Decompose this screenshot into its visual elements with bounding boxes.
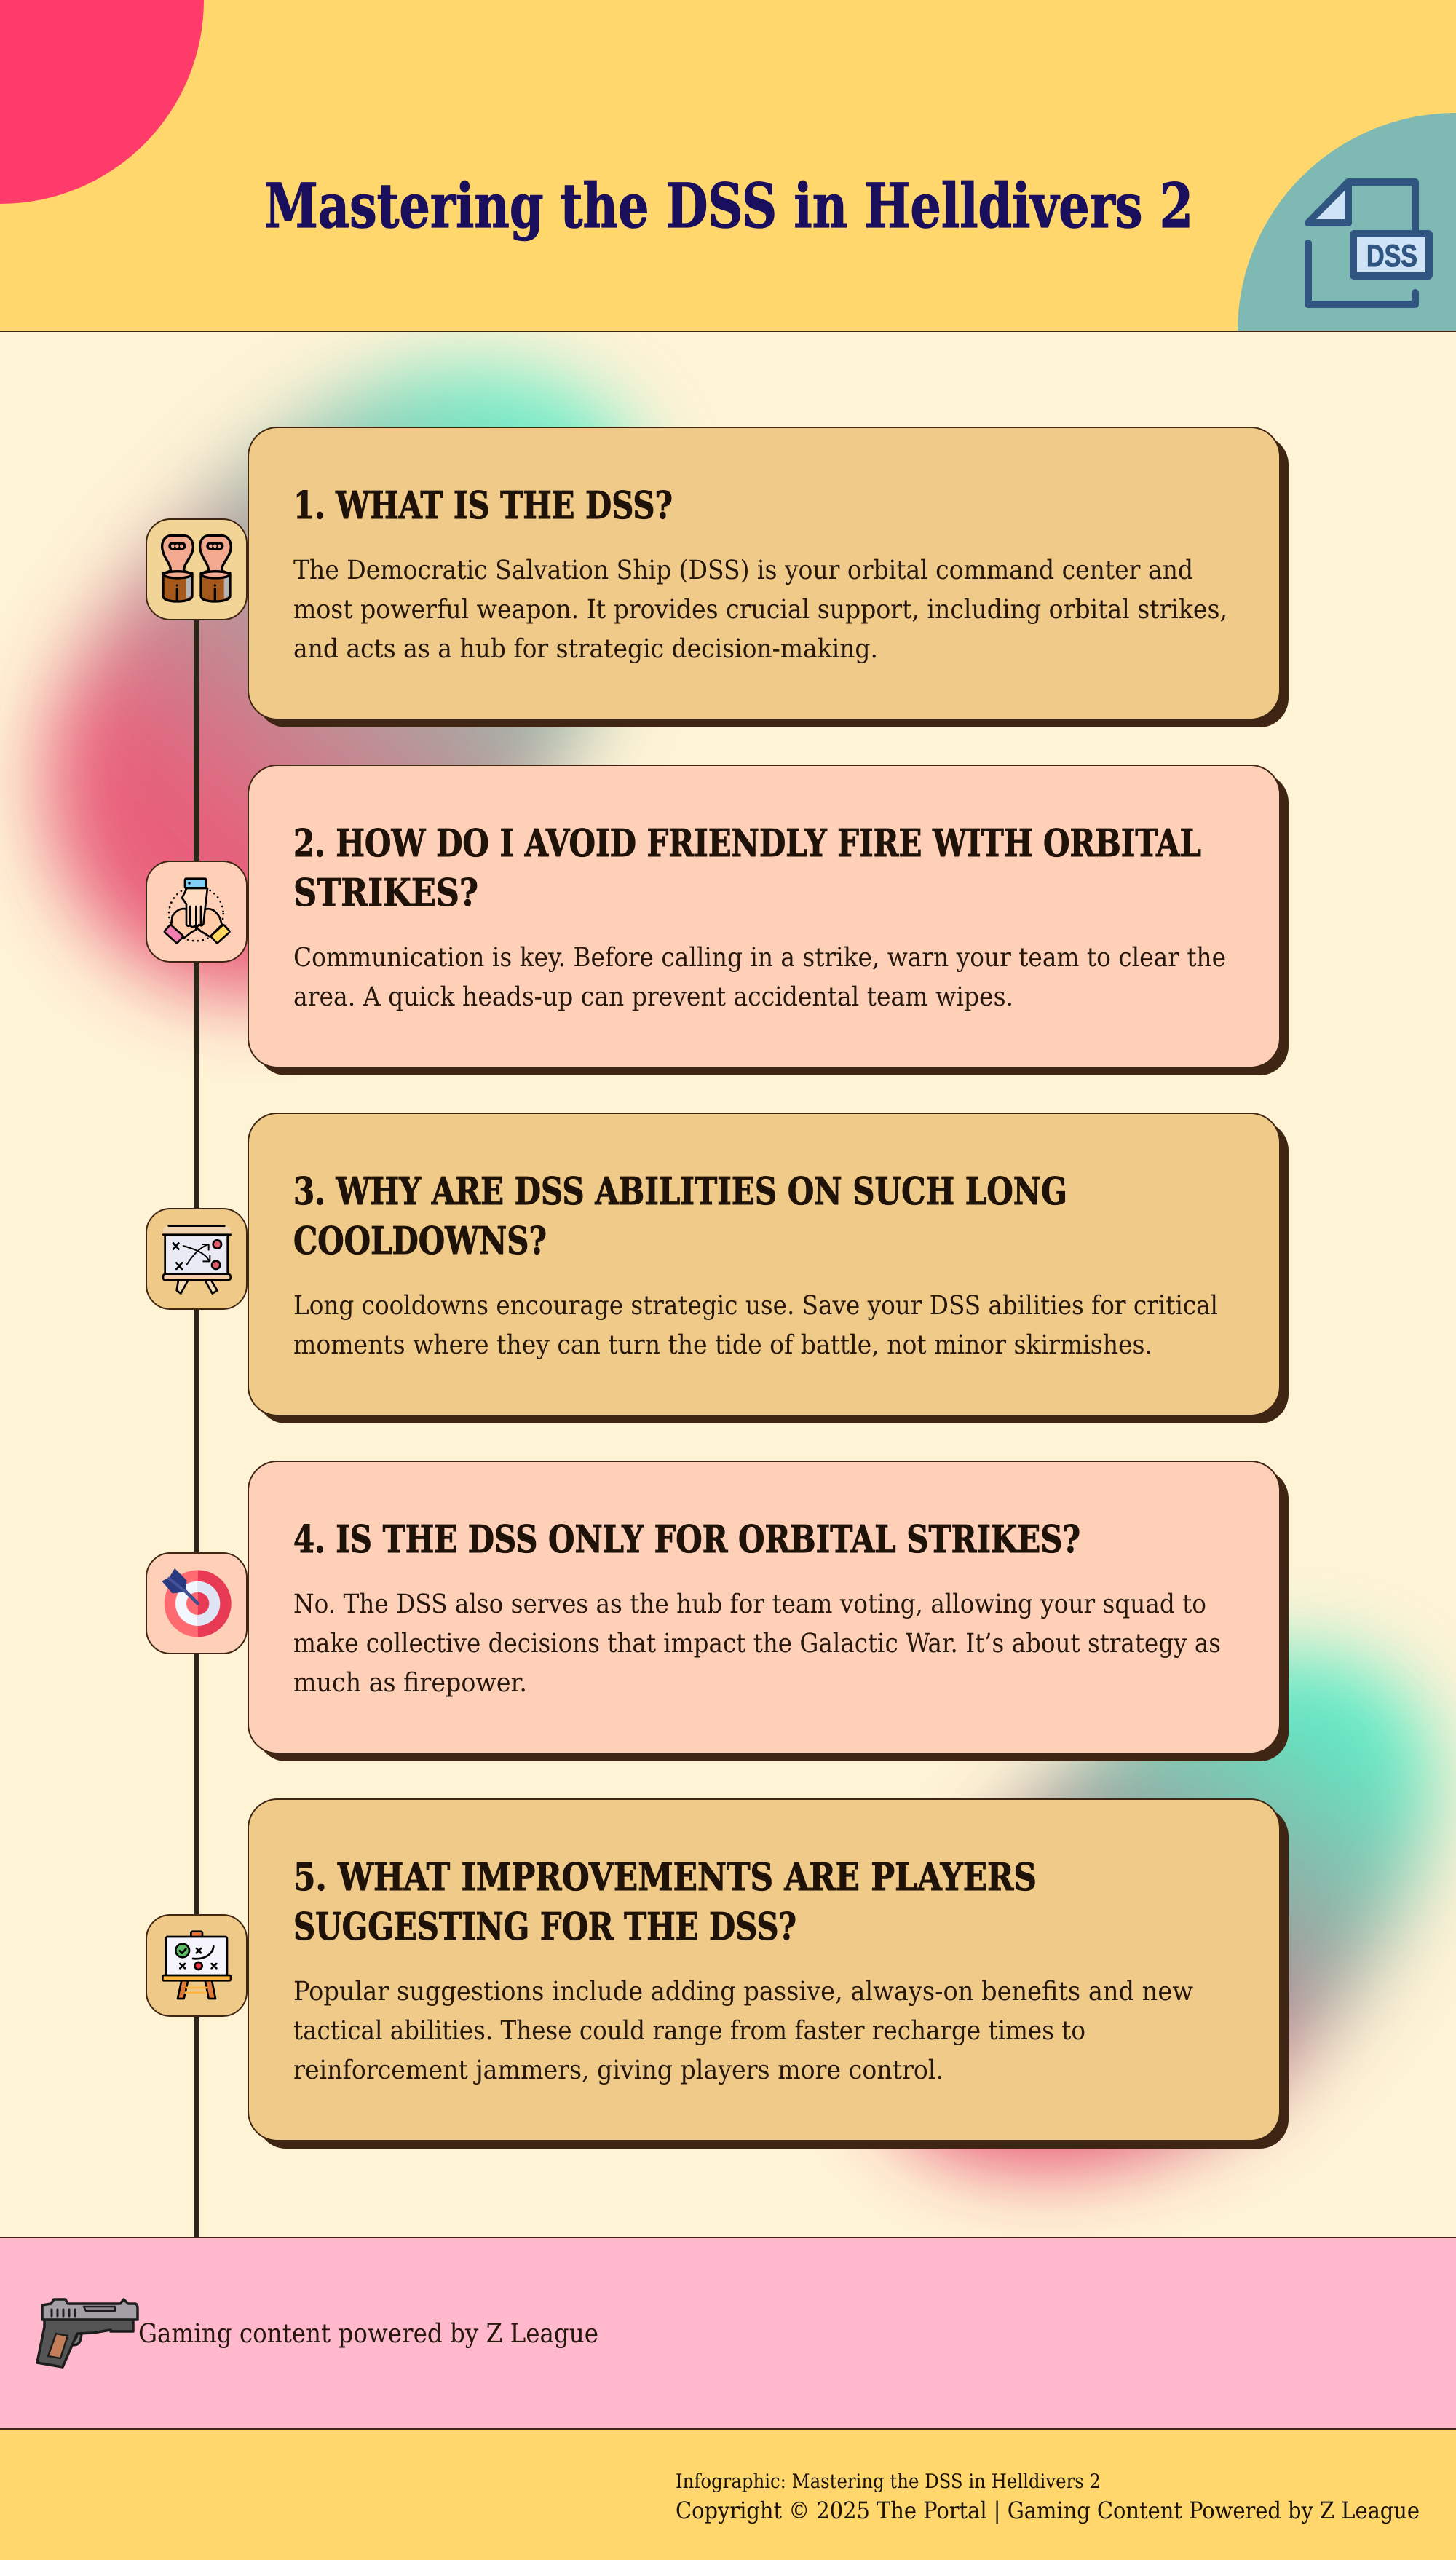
background blob: top left	[46, 368, 641, 997]
heading 5: SUGGESTING FOR THE DSS?	[293, 1905, 796, 1949]
sponsor text: Gaming content powered by Z League	[138, 2319, 598, 2349]
body 5: reinforcement jammers, giving players more control.	[293, 2055, 943, 2085]
heading 5: 5. WHAT IMPROVEMENTS ARE PLAYERS	[293, 1855, 1037, 1900]
panel: card 2	[248, 765, 1289, 1075]
heading 3: 3. WHY ARE DSS ABILITIES ON SUCH LONG	[293, 1169, 1067, 1214]
header band	[0, 0, 1456, 332]
icon: strategy easel	[146, 1915, 247, 2016]
body 3: Long cooldowns encourage strategic use. Save your DSS abilities for critical	[293, 1291, 1218, 1321]
copyright: Copyright © 2025 The Portal | Gaming Content Powered by Z League	[676, 2497, 1420, 2524]
decorative circle: teal	[1238, 113, 1456, 331]
body 1: and acts as a hub for strategic decision-making.	[293, 634, 878, 664]
body 2: area. A quick heads-up can prevent accidental team wipes.	[293, 982, 1013, 1012]
heading 4: 4. IS THE DSS ONLY FOR ORBITAL STRIKES?	[293, 1517, 1080, 1562]
panel: card 4	[248, 1461, 1289, 1761]
heading 2: 2. HOW DO I AVOID FRIENDLY FIRE WITH ORBITAL	[293, 821, 1201, 866]
infographic caption: Infographic: Mastering the DSS in Helldivers 2	[676, 2470, 1101, 2493]
icon: DSS file: DSS	[1366, 239, 1417, 274]
title: Mastering the DSS in Helldivers 2	[264, 170, 1193, 242]
icon: DSS file	[1308, 182, 1429, 304]
body 5: tactical abilities. These could range from faster recharge times to	[293, 2016, 1085, 2046]
background blob: bottom right	[882, 1652, 1434, 2167]
body 1: The Democratic Salvation Ship (DSS) is your orbital command center and	[293, 556, 1193, 585]
panel: card 3	[248, 1113, 1289, 1423]
heading 5	[293, 1855, 1037, 1949]
body 2	[293, 943, 1226, 1012]
body 4: much as firepower.	[293, 1668, 527, 1698]
icon: tactics board	[146, 1209, 247, 1309]
decorative circle: red	[0, 0, 204, 204]
body 4: No. The DSS also serves as the hub for team voting, allowing your squad to	[293, 1589, 1206, 1619]
body 2: Communication is key. Before calling in a strike, warn your team to clear the	[293, 943, 1226, 973]
footer: sponsor band	[0, 2237, 1456, 2430]
icon: pistol	[37, 2299, 138, 2367]
panel: card 1	[248, 427, 1289, 727]
body 4: make collective decisions that impact the Galactic War. It’s about strategy as	[293, 1629, 1221, 1659]
heading 3	[293, 1169, 1067, 1263]
body 1: most powerful weapon. It provides crucial support, including orbital strikes,	[293, 595, 1227, 625]
icon: team hands	[146, 861, 247, 962]
icon: target and dart	[146, 1553, 247, 1654]
panel: card 5	[248, 1799, 1289, 2149]
body 5	[293, 1977, 1193, 2085]
footer: credits band	[0, 2430, 1456, 2560]
body 4	[293, 1589, 1221, 1698]
timeline line	[194, 569, 199, 2238]
body 3	[293, 1291, 1218, 1360]
heading 3: COOLDOWNS?	[293, 1219, 547, 1263]
body 1	[293, 556, 1227, 664]
body 5: Popular suggestions include adding passive, always-on benefits and new	[293, 1977, 1193, 2007]
heading 1: 1. WHAT IS THE DSS?	[293, 483, 673, 528]
icon: hands with gloves	[146, 519, 247, 620]
body 3: moments where they can turn the tide of battle, not minor skirmishes.	[293, 1330, 1152, 1360]
heading 2	[293, 821, 1201, 915]
heading 2: STRIKES?	[293, 871, 478, 915]
